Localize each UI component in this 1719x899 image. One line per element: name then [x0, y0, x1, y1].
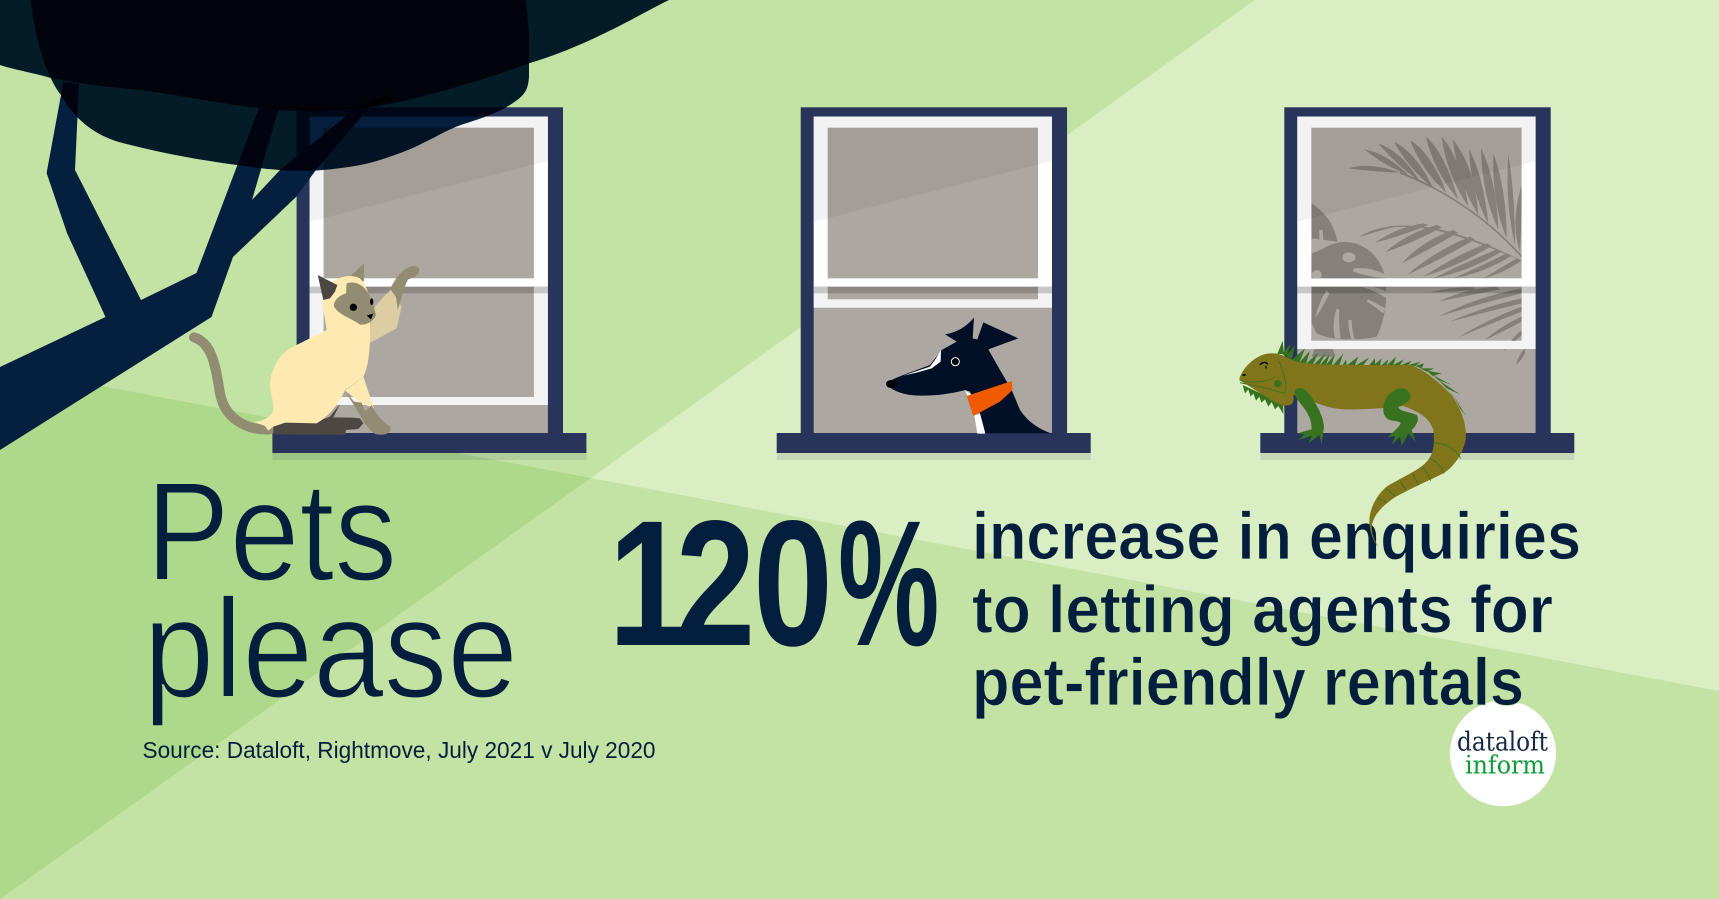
face and tail markings [1239, 362, 1461, 502]
title: Pets please: Pets [146, 452, 397, 610]
raised arm [369, 289, 402, 343]
far ear [350, 263, 364, 282]
dog head and body [886, 318, 1051, 433]
title: Pets please [144, 452, 518, 727]
hind leg [1383, 388, 1418, 446]
big statistic [608, 483, 939, 684]
source note: Source: Dataloft, Rightmove, July 2021 v July 2020 [142, 737, 656, 763]
body and head [253, 276, 371, 431]
window: right with plant shadows [1260, 107, 1574, 460]
statistic description: increase in enquiries [972, 499, 1581, 574]
white chest [965, 390, 985, 434]
title: Pets please: please [144, 569, 518, 727]
cat on left window sill [194, 263, 419, 435]
muzzle stripe [903, 350, 941, 376]
front leg [345, 377, 374, 408]
tree foliage [0, 0, 669, 171]
logo: dataloft inform: dataloft [1457, 728, 1548, 758]
logo: dataloft inform: inform [1465, 750, 1545, 779]
collar [967, 381, 1013, 416]
eyes and nose [350, 304, 357, 311]
face mask [334, 282, 376, 325]
eye [1260, 362, 1268, 368]
window: middle [777, 107, 1091, 460]
tail [194, 337, 270, 429]
body and tail [1239, 353, 1466, 547]
nose [886, 380, 897, 388]
logo: dataloft inform [1450, 700, 1556, 806]
near ear [318, 275, 337, 300]
big statistic: % [838, 483, 939, 683]
dog in middle window [886, 318, 1051, 434]
tree branches [0, 82, 395, 450]
eye [951, 358, 959, 366]
statistic description: pet-friendly rentals [972, 645, 1524, 720]
spines [1243, 341, 1466, 416]
window: left [272, 107, 586, 460]
big statistic: 120 [608, 484, 833, 684]
front leg [1295, 388, 1324, 444]
plant shadows [1312, 137, 1525, 365]
statistic description: to letting agents for [972, 573, 1553, 648]
statistic description [972, 499, 1581, 720]
iguana on right window sill [1239, 341, 1466, 547]
hind legs [273, 404, 363, 435]
